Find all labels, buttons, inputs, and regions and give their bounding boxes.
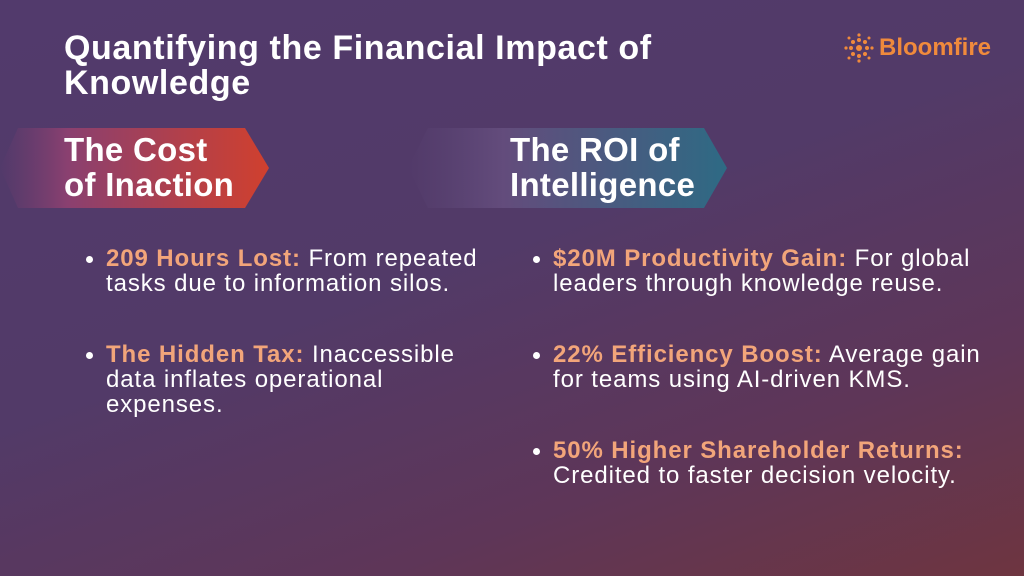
banner: roi of intelligence xyxy=(454,128,727,208)
list: roi: for teams using AI-driven KMS. xyxy=(553,366,911,393)
list: roi xyxy=(533,245,981,489)
list: cost: expenses. xyxy=(106,391,224,418)
list: cost: tasks due to information silos. xyxy=(106,270,450,297)
list: roi: $20M Productivity Gain: For global xyxy=(553,245,970,272)
list: cost: 209 Hours Lost: From repeated xyxy=(106,245,478,272)
banner: cost of inaction: of Inaction xyxy=(64,166,234,203)
icon: bloom xyxy=(844,33,874,63)
list: cost: data inflates operational xyxy=(106,366,383,393)
banner: roi of intelligence: Intelligence xyxy=(510,166,695,203)
logo: Bloomfire xyxy=(879,34,991,61)
banner: cost of inaction xyxy=(12,128,269,208)
list: roi: 22% Efficiency Boost: Average gain xyxy=(553,341,981,368)
list: roi: Credited to faster decision velocity. xyxy=(553,462,957,489)
logo xyxy=(844,33,991,63)
list: cost: The Hidden Tax: Inaccessible xyxy=(106,341,455,368)
title: Quantifying the Financial Impact of xyxy=(64,29,652,67)
list: cost xyxy=(86,245,478,418)
title: Knowledge xyxy=(64,64,251,102)
list: roi: 50% Higher Shareholder Returns: xyxy=(553,437,964,464)
banner: cost of inaction: The Cost xyxy=(64,131,208,168)
title xyxy=(64,29,652,102)
banner: roi of intelligence: The ROI of xyxy=(510,131,680,168)
list: roi: leaders through knowledge reuse. xyxy=(553,270,943,297)
